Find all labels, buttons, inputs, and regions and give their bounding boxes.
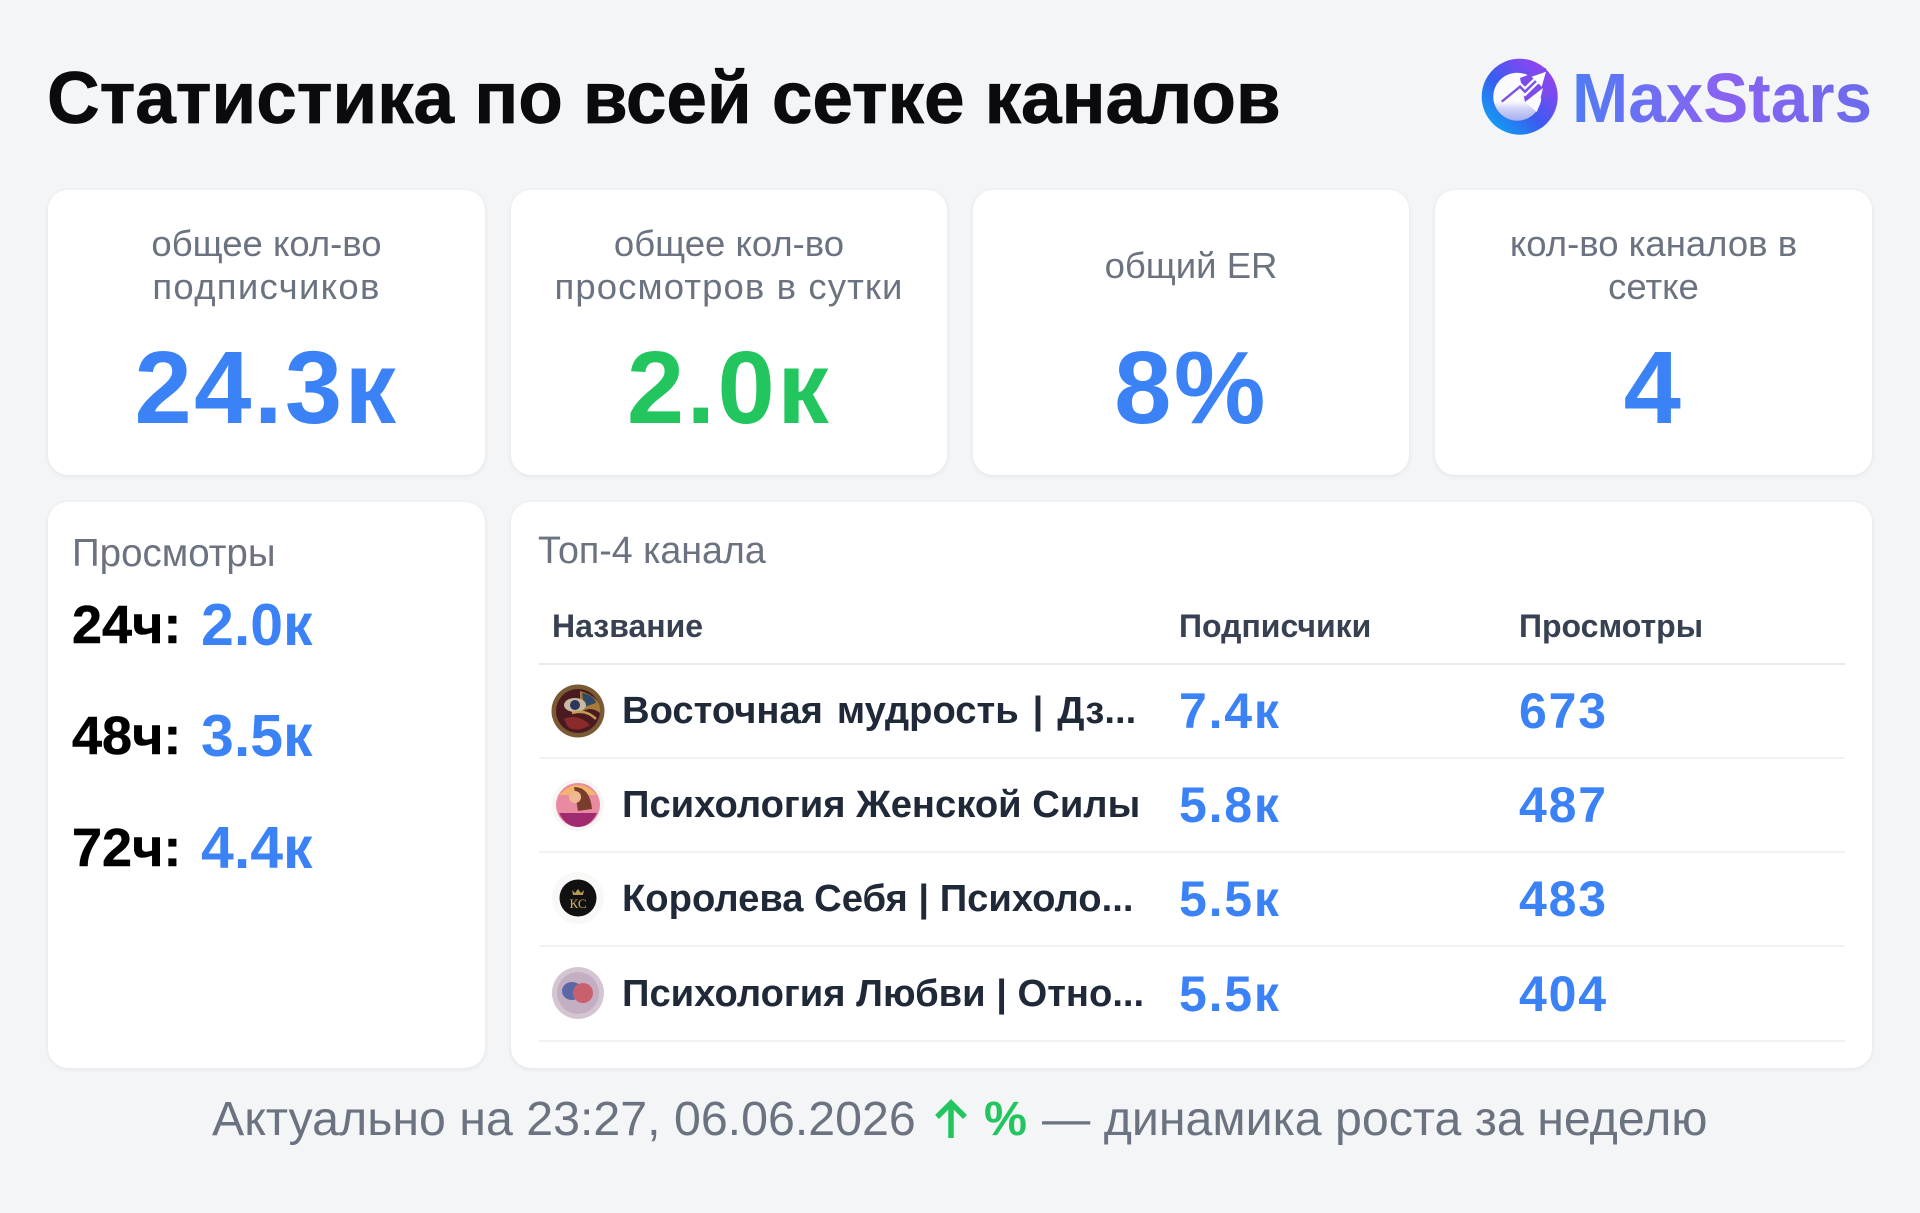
label: общее кол-во [614,223,844,264]
icon: avatar 3 [560,880,596,916]
icon: logo mark [1482,58,1558,135]
title: Статистика по всей сетке каналов [47,58,1281,139]
table heading: Топ-4 канала [538,529,766,571]
channel 3 views: 483 [1519,871,1608,927]
label [555,223,903,307]
channel 3 subscribers: 5.5к [1179,871,1281,927]
footer note [212,1092,1708,1146]
label [151,223,382,307]
logo [1482,58,1872,137]
column: name: Название [552,608,703,644]
panel: views: 4.4к [201,815,313,881]
panel: views per day [511,190,947,475]
value: 4 [1624,330,1683,445]
channel 1 subscribers: 7.4к [1179,683,1281,739]
panel: ER [973,190,1409,475]
percent sign: % [984,1092,1027,1146]
label: сетке [1608,266,1699,307]
heading: Просмотры [72,532,276,575]
icon: avatar 3: КС [569,896,587,911]
24h [72,592,313,658]
48h [72,703,313,769]
panel: views: 3.5к [201,703,313,769]
logo wordmark: MaxStars [1572,59,1872,137]
panel: top channels [511,502,1872,1068]
icon: avatar 4 [552,967,604,1019]
panel: views: 2.0к [201,592,313,658]
label: кол-во каналов в [1510,223,1797,264]
24h: 24ч: [72,595,181,655]
label: просмотров в сутки [555,266,903,307]
footer caption: — динамика роста за неделю [1042,1092,1708,1146]
icon: avatar 1 [552,684,604,738]
column: subscribers: Подписчики [1179,608,1371,644]
label: общий ER [1105,245,1277,286]
channel 4 views: 404 [1519,966,1608,1022]
48h: 48ч: [72,706,181,766]
label: общее кол-во [151,223,382,264]
label: подписчиков [152,266,381,307]
channel 1 views: 673 [1519,683,1608,739]
channel 4 subscribers: 5.5к [1179,966,1281,1022]
value: 24.3к [134,330,399,445]
value: 2.0к [627,330,831,445]
value: 8% [1114,330,1268,445]
channel 2 name: Психология Женской Силы [622,783,1140,826]
footer date: Актуально на 23:27, 06.06.2026 [212,1092,916,1146]
channel 3 name: Королева Себя | Психоло... [622,877,1133,920]
channel 2 views: 487 [1519,777,1608,833]
column: views: Просмотры [1519,608,1703,644]
channel 1 name: Восточная мудрость | Дз... [622,689,1136,732]
icon: growth arrow [935,1099,967,1138]
panel: subscribers [48,190,485,475]
channel 4 name: Психология Любви | Отно... [622,972,1144,1015]
label [1510,223,1797,307]
panel: views [48,502,485,1068]
icon: avatar 2 [552,779,604,831]
channel 2 subscribers: 5.8к [1179,777,1281,833]
72h [72,815,313,881]
72h: 72ч: [72,818,181,878]
panel: channels [1435,190,1872,475]
